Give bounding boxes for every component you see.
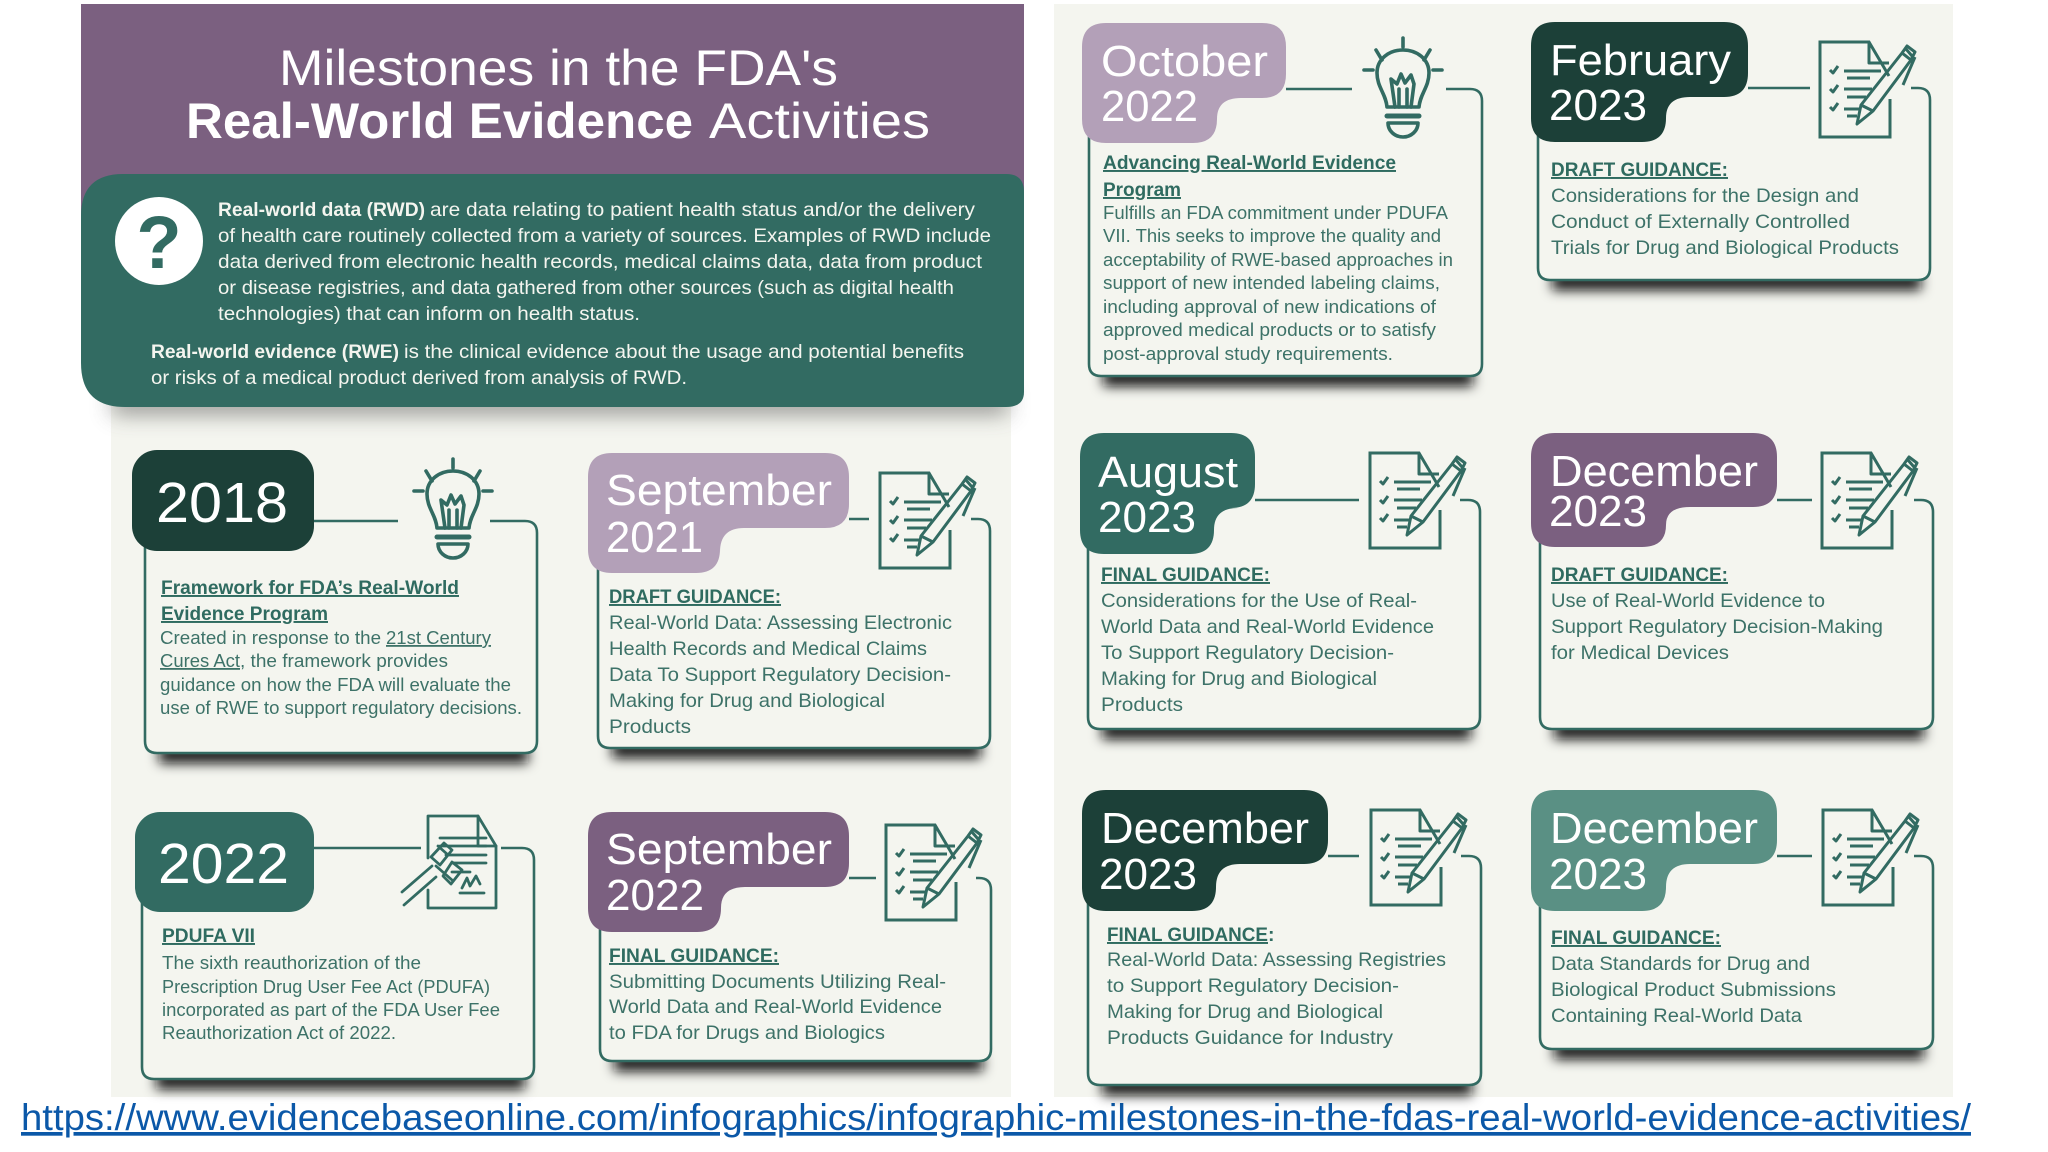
definition: real-world evidence: or risks of a medical product derived from analysis of RWD. <box>151 367 687 389</box>
card text: Considerations for the Design and <box>1551 185 1859 207</box>
icon: document and pencil <box>1370 453 1465 548</box>
icon: gavel on document <box>402 816 496 908</box>
card box <box>1088 500 1480 729</box>
icon: document and pencil <box>880 473 975 568</box>
date <box>1549 36 1731 130</box>
date badge <box>588 812 849 932</box>
card text: The sixth reauthorization of the <box>162 953 421 973</box>
date: February <box>1550 36 1731 85</box>
card text: Products <box>609 716 691 738</box>
date <box>606 825 832 920</box>
card text: Containing Real-World Data <box>1551 1005 1802 1027</box>
card text <box>162 925 500 1043</box>
title: Real-World Evidence <box>186 93 693 149</box>
card text: : <box>1268 924 1274 946</box>
card text: Cures Act <box>160 651 240 671</box>
icon: question mark <box>115 197 203 285</box>
date <box>1549 804 1758 899</box>
card text: approved medical products or to satisfy <box>1103 320 1436 340</box>
date: 2023 <box>1549 81 1647 130</box>
card text: for Medical Devices <box>1551 642 1729 664</box>
milestone: 2018 <box>132 450 537 763</box>
date: December <box>1550 447 1758 496</box>
card text <box>1107 924 1446 1049</box>
card text: DRAFT GUIDANCE: <box>609 586 781 608</box>
date badge <box>1531 22 1748 142</box>
date <box>1098 448 1238 542</box>
date badge <box>1082 23 1286 143</box>
card text <box>1551 927 1836 1027</box>
date badge <box>1531 790 1777 911</box>
milestone: September 2022 <box>588 812 991 1071</box>
card box <box>600 878 991 1061</box>
card text: Conduct of Externally Controlled <box>1551 211 1850 233</box>
definition: real-world data: technologies) that can inform on health status. <box>218 303 640 325</box>
date: August <box>1098 448 1238 497</box>
card text: including approval of new indications of <box>1103 297 1437 317</box>
title <box>186 40 930 149</box>
card text: World Data and Real-World Evidence <box>1101 616 1434 638</box>
milestone: February 2023 <box>1531 22 1930 290</box>
card text: World Data and Real-World Evidence <box>609 996 942 1018</box>
card text: Real-World Data: Assessing Registries <box>1107 949 1446 971</box>
card text: Making for Drug and Biological <box>1107 1001 1383 1023</box>
definition: real-world evidence: is the clinical evidence about the usage and potential benefits <box>404 341 964 363</box>
definitions background <box>81 174 1024 407</box>
card text <box>1103 152 1453 364</box>
date: 2022 <box>158 832 289 896</box>
card text: FINAL GUIDANCE <box>1107 924 1268 946</box>
definition: real-world data: or disease registries, and data gathered from other sources (such as digital health <box>218 277 954 299</box>
card text: Considerations for the Use of Real- <box>1101 590 1417 612</box>
card text: FINAL GUIDANCE: <box>609 945 779 967</box>
card text: guidance on how the FDA will evaluate the <box>160 675 511 695</box>
card text: Health Records and Medical Claims <box>609 638 927 660</box>
date: 2023 <box>1549 850 1647 899</box>
card text: Products Guidance for Industry <box>1107 1027 1393 1049</box>
card text: Evidence Program <box>161 603 328 625</box>
card text: Created in response to the <box>160 628 381 648</box>
date: 2023 <box>1549 487 1647 536</box>
card text: Data To Support Regulatory Decision- <box>609 664 951 686</box>
milestone: October 2022 <box>1082 23 1482 386</box>
definition: real-world evidence: Real-world evidence (RWE) <box>151 341 399 363</box>
date badge <box>1082 790 1328 911</box>
card text: Use of Real-World Evidence to <box>1551 590 1825 612</box>
card text: Framework for FDA’s Real-World <box>161 577 459 599</box>
card text: Products <box>1101 694 1183 716</box>
card text: DRAFT GUIDANCE: <box>1551 564 1728 586</box>
card text: to FDA for Drugs and Biologics <box>609 1022 885 1044</box>
card text: Program <box>1103 179 1181 201</box>
date: 2018 <box>156 471 288 535</box>
panel: definitions <box>81 174 1024 414</box>
definition: real-world data <box>218 199 991 325</box>
date: 2023 <box>1099 850 1197 899</box>
icon: question mark: ? <box>136 201 182 284</box>
card text <box>1551 564 1883 664</box>
milestone: December 2023 draft <box>1531 433 1933 739</box>
date badge <box>1080 433 1255 554</box>
date badge <box>132 450 314 551</box>
card text: To Support Regulatory Decision- <box>1101 642 1394 664</box>
card text: , the framework provides <box>240 651 448 671</box>
card text: Trials for Drug and Biological Products <box>1551 237 1899 259</box>
card text: Submitting Documents Utilizing Real- <box>609 971 946 993</box>
date badge <box>135 812 314 912</box>
card text: Making for Drug and Biological <box>609 690 885 712</box>
icon: document and pencil <box>1823 810 1918 905</box>
definition: real-world data: data derived from electronic health records, medical claims data, data from product <box>218 251 983 273</box>
date: October <box>1101 37 1268 86</box>
card box <box>1540 500 1933 729</box>
panel: right timeline background <box>1054 4 1953 1097</box>
card text: 21st Century <box>386 628 491 648</box>
card box <box>1088 856 1481 1085</box>
milestone: December 2023 data standards <box>1531 790 1933 1059</box>
definition: real-world evidence <box>151 341 964 389</box>
card text <box>609 945 946 1044</box>
title: Activities <box>709 93 930 149</box>
definition: real-world data: of health care routinely collected from a variety of sources. Examples of RWD include <box>218 225 991 247</box>
card text <box>160 577 522 718</box>
card text: Fulfills an FDA commitment under PDUFA <box>1103 203 1448 223</box>
date: September <box>606 466 832 515</box>
icon: document and pencil <box>1822 453 1917 548</box>
card box <box>1089 89 1482 376</box>
panel: left timeline background <box>111 400 1011 1097</box>
card text: use of RWE to support regulatory decisions. <box>160 698 522 718</box>
card text: incorporated as part of the FDA User Fee <box>162 1000 500 1020</box>
date: December <box>1101 804 1309 853</box>
card box <box>1540 856 1933 1049</box>
date: December <box>1550 804 1758 853</box>
icon: document and pencil <box>1371 810 1466 905</box>
date badge <box>588 453 849 573</box>
card text: FINAL GUIDANCE: <box>1551 927 1721 949</box>
milestone: August 2023 <box>1080 433 1480 739</box>
card box <box>598 519 990 748</box>
card text: Making for Drug and Biological <box>1101 668 1377 690</box>
card text: PDUFA VII <box>162 925 255 947</box>
card text: DRAFT GUIDANCE: <box>1551 159 1728 181</box>
definition: real-world data: are data relating to patient health status and/or the delivery <box>430 199 975 221</box>
header background <box>81 4 1024 234</box>
date: 2021 <box>606 513 703 562</box>
date: 2023 <box>1098 493 1196 542</box>
milestone: 2022 <box>135 812 534 1089</box>
card text <box>1101 564 1434 716</box>
card text <box>1551 159 1899 259</box>
title: Milestones in the FDA's <box>279 40 838 96</box>
date <box>606 466 832 562</box>
card text: Prescription Drug User Fee Act (PDUFA) <box>162 977 490 997</box>
milestone: December 2023 final <box>1082 790 1481 1095</box>
icon: document and pencil <box>886 825 981 920</box>
card text: support of new intended labeling claims, <box>1103 273 1440 293</box>
card text: acceptability of RWE-based approaches in <box>1103 250 1453 270</box>
card text: Data Standards for Drug and <box>1551 953 1810 975</box>
milestone: September 2021 <box>588 453 990 758</box>
icon: document and pencil <box>1820 42 1915 137</box>
source url: https://www.evidencebaseonline.com/infographics/infographic-milestones-in-the-fdas-real-world-evidence-activities/ <box>21 1097 1972 1138</box>
icon: light bulb <box>1364 38 1442 137</box>
card text: Support Regulatory Decision-Making <box>1551 616 1883 638</box>
date <box>1099 804 1309 899</box>
card text: Advancing Real-World Evidence <box>1103 152 1396 174</box>
definition: real-world data: Real-world data (RWD) <box>218 199 425 221</box>
card text: FINAL GUIDANCE: <box>1101 564 1270 586</box>
panel: header <box>81 4 1024 234</box>
card text: to Support Regulatory Decision- <box>1107 975 1399 997</box>
date: September <box>606 825 832 874</box>
card text <box>609 586 952 738</box>
card text: post-approval study requirements. <box>1103 344 1393 364</box>
card box <box>1538 88 1930 280</box>
card text: Biological Product Submissions <box>1551 979 1836 1001</box>
date: 2022 <box>1101 82 1198 131</box>
date <box>1101 37 1268 131</box>
card text: VII. This seeks to improve the quality and <box>1103 226 1441 246</box>
card text: Reauthorization Act of 2022. <box>162 1023 396 1043</box>
icon: light bulb <box>414 459 492 558</box>
card box <box>145 521 537 753</box>
date: 2022 <box>606 871 704 920</box>
card box <box>142 848 534 1079</box>
card text: Real-World Data: Assessing Electronic <box>609 612 952 634</box>
date badge <box>1531 433 1777 547</box>
date <box>1549 447 1758 536</box>
